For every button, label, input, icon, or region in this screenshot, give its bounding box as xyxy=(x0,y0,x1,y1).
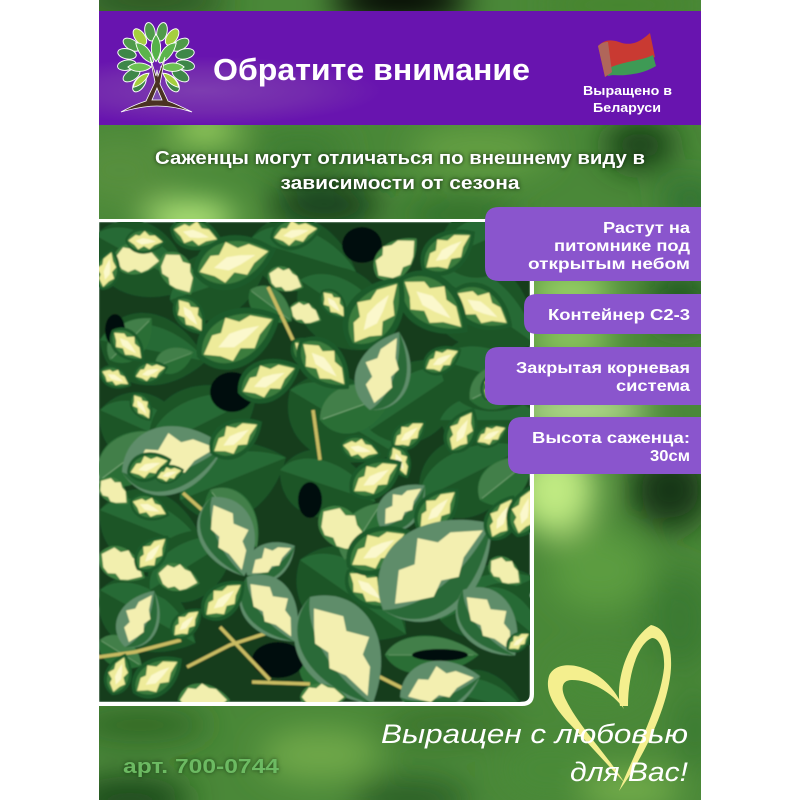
info pill: container xyxy=(524,294,701,334)
badge: grown in Belarus xyxy=(583,33,672,115)
info pill: height: 30см xyxy=(650,448,690,465)
info pill: height: Высота саженца: xyxy=(532,430,690,447)
title: Обратите внимание xyxy=(213,52,530,87)
info pill: nursery: открытым небом xyxy=(528,256,690,273)
info pill: container: Контейнер С2-3 xyxy=(548,307,690,324)
info pill: nursery xyxy=(485,207,701,281)
slogan: для Вас! xyxy=(570,757,689,787)
dark foliage layer xyxy=(99,222,530,702)
variegated leaves, lower xyxy=(99,451,530,702)
info pill: root system: Закрытая корневая xyxy=(516,360,690,377)
tree trunk and roots xyxy=(121,57,192,112)
subtitle xyxy=(155,148,645,193)
slogan: Выращен с любовью xyxy=(381,719,688,749)
icon: heart xyxy=(548,625,671,791)
article number: арт. 700-0744 xyxy=(123,756,280,778)
icon: flag of Belarus xyxy=(598,33,656,77)
badge: grown in Belarus: Беларуси xyxy=(593,101,661,115)
subtitle: Саженцы могут отличаться по внешнему виду в xyxy=(155,148,645,168)
tree crown leaves xyxy=(117,22,195,94)
rear green leaves xyxy=(85,277,545,707)
info pill: height xyxy=(508,417,701,474)
info pill: root system: система xyxy=(616,378,690,395)
slogan xyxy=(381,719,689,787)
badge text: Выращено в xyxy=(583,84,672,98)
info pill: nursery: питомнике под xyxy=(554,238,690,255)
header band xyxy=(99,11,701,125)
logo: tree xyxy=(117,22,195,112)
photo: variegated euonymus leaves xyxy=(99,222,530,702)
info pill: root system xyxy=(485,347,701,405)
black gaps xyxy=(105,227,468,692)
photo frame xyxy=(99,219,534,706)
variegated leaves, upper xyxy=(99,222,512,496)
info pill: nursery: Растут на xyxy=(603,220,690,237)
stems xyxy=(99,287,410,692)
subtitle: зависимости от сезона xyxy=(280,173,521,193)
